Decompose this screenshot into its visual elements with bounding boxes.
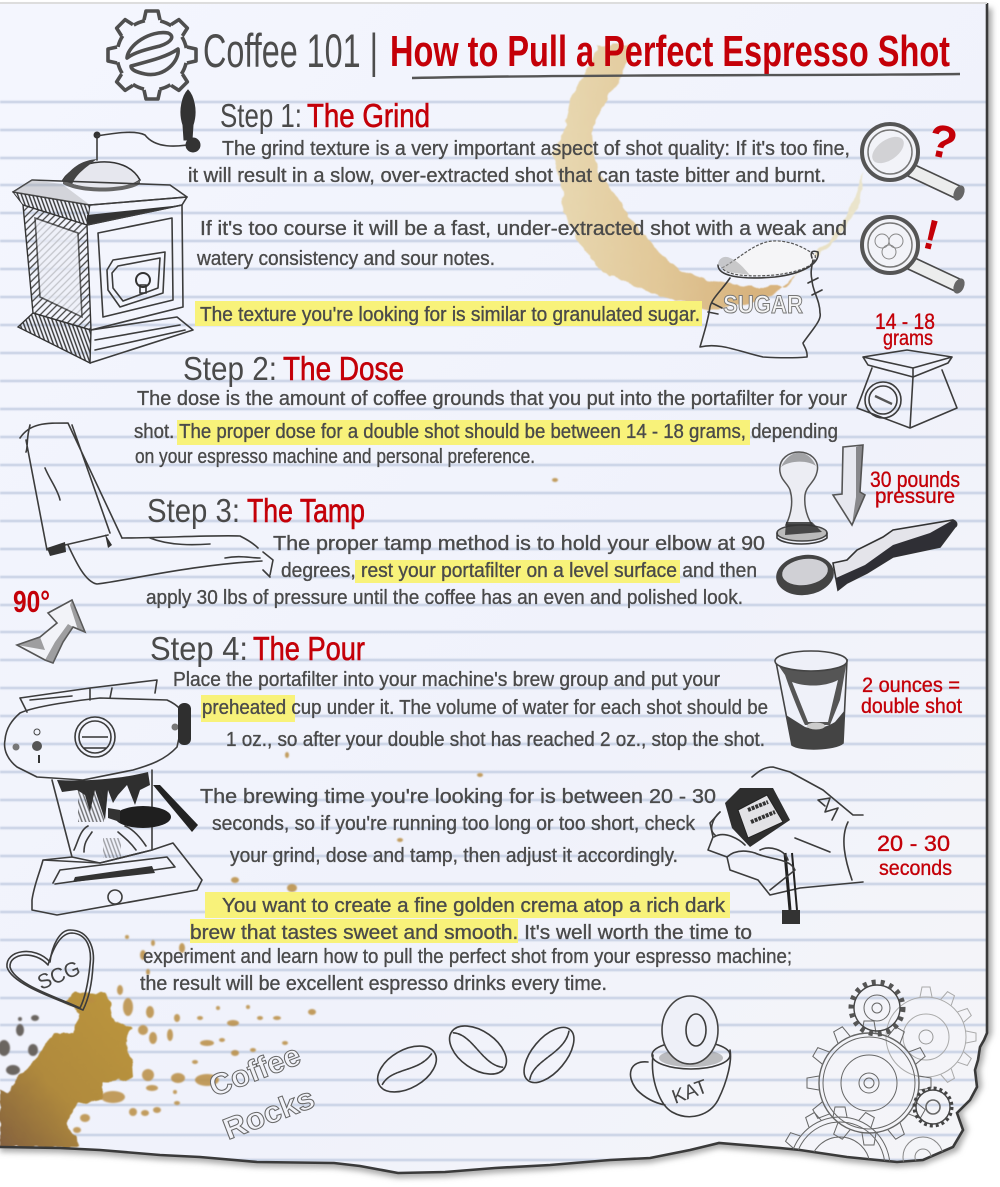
step 4 heading: The Pour — [253, 630, 365, 667]
text art: coffee rocks: Rocks — [219, 1082, 319, 1147]
illustration: sugar sack — [700, 241, 822, 358]
step 1 text: it will result in a slow, over-extracted shot that can taste bitter and burnt. — [188, 165, 826, 187]
illustration: espresso machine — [5, 680, 202, 915]
step 4 text: brew that tastes sweet and smooth. It's well worth the time to — [190, 922, 752, 944]
step 3 text: apply 30 lbs of pressure until the coffee has an even and polished look. — [146, 587, 743, 609]
step 4 text: 1 oz., so after your double shot has reached 2 oz., stop the shot. — [226, 729, 765, 751]
question mark: ? — [924, 113, 962, 170]
step 4 text: experiment and learn how to pull the perfect shot from your espresso machine; — [143, 946, 792, 968]
step 2 highlight — [177, 420, 750, 445]
step 1 heading: Step 1: — [220, 97, 302, 134]
step 4 highlights — [190, 695, 730, 943]
label: 14-18 grams: 14 - 18 — [875, 309, 935, 334]
illustration: gears — [785, 980, 976, 1162]
step 4 text: Place the portafilter into your machine's brew group and put your — [173, 669, 720, 691]
step 1 text: If it's too course it will be a fast, under-extracted shot with a weak and — [200, 218, 847, 240]
icon: hand holding stopwatch — [708, 767, 863, 924]
step 4 text: your grind, dose and tamp, then adjust it accordingly. — [230, 845, 678, 867]
icon: kitchen scale — [857, 350, 957, 428]
exclamation mark: ! — [919, 210, 944, 259]
step 4 section — [140, 630, 792, 995]
step 2 section — [134, 350, 847, 468]
step 2 text: The dose is the amount of coffee grounds that you put into the portafilter for your — [137, 388, 847, 410]
icon: coffee beans — [370, 1016, 583, 1101]
icon: portafilter — [773, 520, 957, 599]
step 1 text — [188, 138, 850, 270]
step 3 heading: Step 3: — [147, 492, 240, 529]
label: 30 pounds pressure: 30 pounds — [870, 467, 960, 492]
step 2 heading: The Dose — [283, 350, 404, 387]
icon: cup with cookie — [630, 996, 730, 1117]
illustration: sugar sack: SUGAR — [723, 291, 803, 319]
label: 20-30 seconds: seconds — [879, 857, 952, 880]
step 2 text: shot. The proper dose for a double shot should be between 14 - 18 grams, depending — [134, 421, 838, 443]
icon: cup with cookie: KAT — [669, 1076, 711, 1109]
label: 14-18 grams — [875, 309, 935, 350]
label: 14-18 grams: grams — [883, 327, 933, 350]
step 4 text: the result will be excellent espresso drinks every time. — [140, 973, 607, 995]
label: 2 ounces double shot: double shot — [861, 695, 962, 718]
step 3 text — [146, 533, 765, 609]
title: Coffee 101 | — [203, 24, 378, 77]
illustration: bent arm — [20, 423, 273, 584]
step 1 heading: The Grind — [307, 97, 430, 134]
step 3 text: degrees, rest your portafilter on a level surface and then — [281, 560, 757, 582]
step 1 text: watery consistency and sour notes. — [196, 248, 495, 270]
label: 30 pounds pressure: pressure — [875, 485, 955, 508]
coffee ring stain — [553, 45, 864, 310]
icon: shot glass — [775, 651, 847, 749]
label: 90 degrees: 90° — [13, 584, 50, 619]
label: 2 ounces double shot — [861, 674, 962, 718]
label: 20-30 seconds — [877, 831, 952, 880]
step 3 section — [146, 492, 765, 609]
step 4 text: preheated cup under it. The volume of water for each shot should be — [202, 697, 768, 719]
step 4 heading — [150, 630, 365, 667]
step 1 text: The grind texture is a very important aspect of shot quality: If it's too fine, — [222, 138, 850, 160]
step 3 text: The proper tamp method is to hold your elbow at 90 — [273, 533, 765, 555]
icon: magnifier coarse grounds — [862, 217, 967, 295]
step 2 heading: Step 2: — [183, 350, 277, 387]
icon: heart with initials — [7, 930, 93, 1010]
step 4 text: The brewing time you're looking for is between 20 - 30 — [200, 786, 716, 808]
icon: 90 degree arrow — [17, 600, 85, 663]
step 3 highlight — [355, 560, 680, 583]
step 1 section — [188, 97, 850, 326]
label: 20-30 seconds: 20 - 30 — [877, 831, 950, 856]
text art: coffee rocks: Coffee — [205, 1039, 305, 1104]
step 3 heading — [147, 492, 365, 529]
step 4 text — [140, 669, 792, 995]
icon: gear with coffee bean — [108, 11, 196, 99]
step 4 text: You want to create a fine golden crema atop a rich dark — [222, 895, 726, 917]
icon: down arrow — [833, 445, 865, 525]
label: 2 ounces double shot: 2 ounces = — [862, 674, 960, 697]
step 1 heading — [220, 97, 430, 134]
label: 30 pounds pressure — [870, 467, 960, 508]
step 3 heading: The Tamp — [247, 492, 365, 529]
step 2 text — [134, 388, 847, 468]
illustration: coffee grinder — [13, 90, 200, 363]
icon: heart with initials: SCG — [34, 957, 84, 995]
icon: tamper — [777, 452, 827, 544]
text art: coffee rocks — [205, 1039, 319, 1147]
icon: magnifier fine grounds — [862, 124, 967, 202]
step 4 text: seconds, so if you're running too long or too short, check — [212, 813, 696, 835]
step 2 heading — [183, 350, 404, 387]
coffee splatter stain — [0, 478, 558, 1147]
step 4 heading: Step 4: — [150, 630, 248, 667]
step 1 highlighted tip: The texture you're looking for is similar to granulated sugar. — [200, 304, 700, 326]
title — [203, 24, 960, 78]
step 2 text: on your espresso machine and personal preference. — [135, 446, 535, 468]
